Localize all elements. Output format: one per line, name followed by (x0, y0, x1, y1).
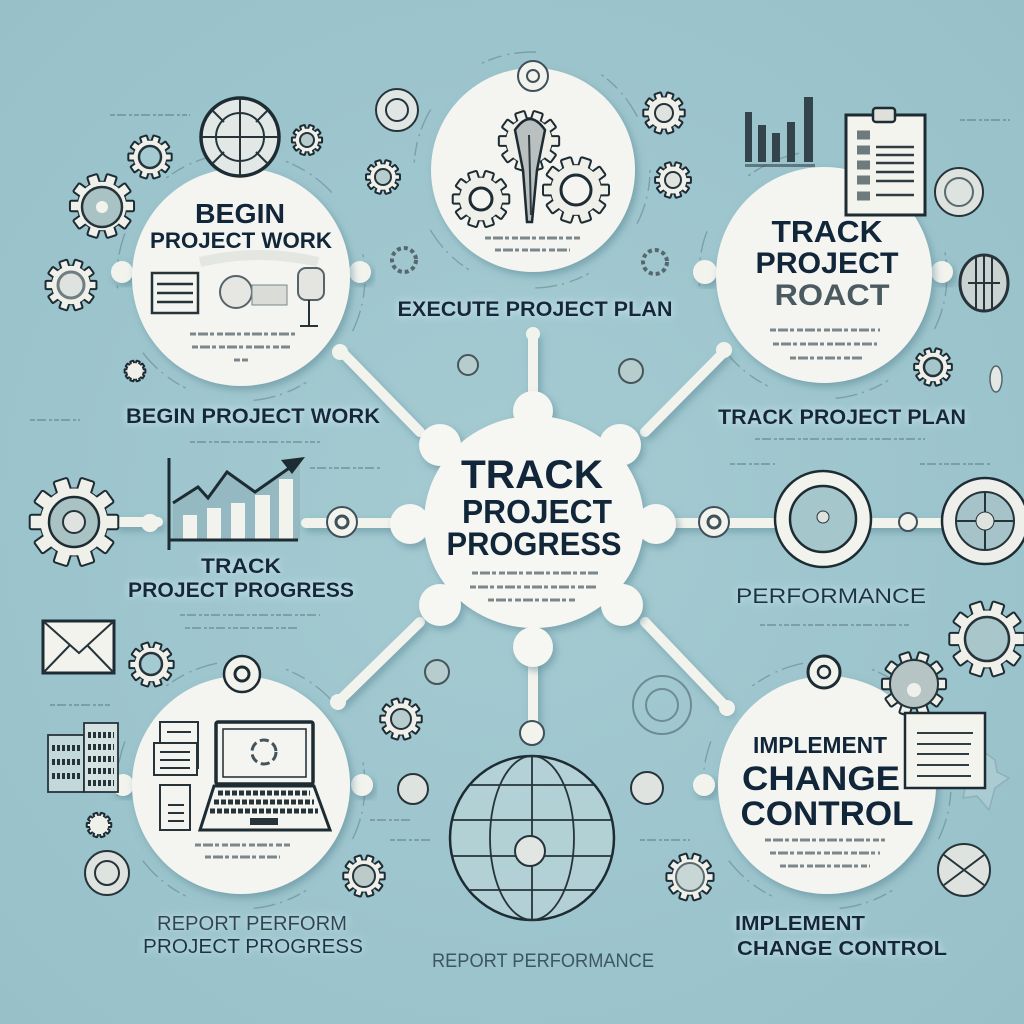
label: begin project work: BEGIN PROJECT WORK (126, 405, 380, 428)
heading: track project progress: PROJECT (462, 493, 612, 530)
label: performance: PERFORMANCE (736, 585, 926, 608)
label: track project plan: TRACK PROJECT PLAN (718, 406, 966, 429)
label: track project progress: TRACK (201, 555, 281, 578)
connector spokes (118, 335, 945, 730)
label: track project progress (128, 555, 354, 602)
heading: track project roact: TRACK (772, 214, 883, 249)
heading: track project progress (446, 453, 622, 562)
icon: right target dial (775, 471, 871, 567)
panel: execute project plan (431, 61, 635, 272)
heading: implement change control: CONTROL (740, 795, 914, 833)
dotted arcs around panels (117, 52, 951, 909)
icon: clipboard (846, 108, 925, 215)
label: report project progress (143, 913, 363, 958)
icon: document and tools (152, 255, 324, 326)
icon: bar chart (745, 97, 815, 167)
text block: hub details (470, 573, 598, 600)
panel: implement change control (693, 652, 1009, 894)
icon: documents (154, 722, 198, 830)
heading: track project roact (756, 214, 898, 312)
heading: project work: PROJECT WORK (150, 228, 332, 253)
panel: central hub (390, 391, 676, 667)
connector nodes (141, 327, 917, 745)
icon: globe bottom (450, 756, 614, 920)
icon: gears and pin (453, 111, 609, 227)
faint caption text lines (30, 115, 1010, 840)
text block: report details (195, 845, 290, 857)
icon: gear (882, 652, 946, 716)
heading: track project progress: PROGRESS (446, 526, 622, 562)
icon: laptop (200, 722, 330, 830)
heading: implement change control: CHANGE (742, 760, 900, 798)
small gears and decorative icons (46, 89, 1024, 901)
icon: far right target (942, 478, 1024, 564)
icon: building (48, 723, 118, 792)
panel: begin project work (111, 168, 371, 386)
text block: implement details (765, 840, 885, 866)
label: report performance: REPORT PERFORMANCE (432, 951, 654, 972)
icon: globe top left (201, 98, 279, 176)
label: implement change control (735, 913, 947, 960)
label: report project progress: REPORT PERFORM (157, 913, 347, 935)
heading: implement change control (740, 732, 914, 833)
heading: track project roact: ROACT (774, 279, 890, 312)
text block: begin project details (190, 334, 298, 360)
text block: track details (770, 330, 880, 358)
label: report project progress: PROJECT PROGRESS (143, 936, 363, 958)
icon: large gear left (30, 478, 118, 566)
chart: growth line and bars (169, 457, 305, 550)
label: track project progress: PROJECT PROGRESS (128, 579, 354, 602)
label: implement change control: CHANGE CONTROL (737, 938, 947, 960)
icon: document (905, 713, 985, 788)
text block: execute details (485, 238, 580, 250)
icon: envelope (43, 621, 114, 673)
heading: track project progress: TRACK (461, 453, 603, 497)
panel: track project plan (693, 97, 953, 383)
label: implement change control: IMPLEMENT (735, 913, 865, 935)
icon: faint gear behind document (963, 745, 1009, 810)
heading: begin: BEGIN (195, 198, 285, 229)
heading: track project roact: PROJECT (756, 247, 898, 280)
label: execute project plan: EXECUTE PROJECT PLAN (398, 298, 672, 321)
heading: implement change control: IMPLEMENT (753, 732, 887, 758)
panel: report project progress laptop (112, 656, 373, 894)
